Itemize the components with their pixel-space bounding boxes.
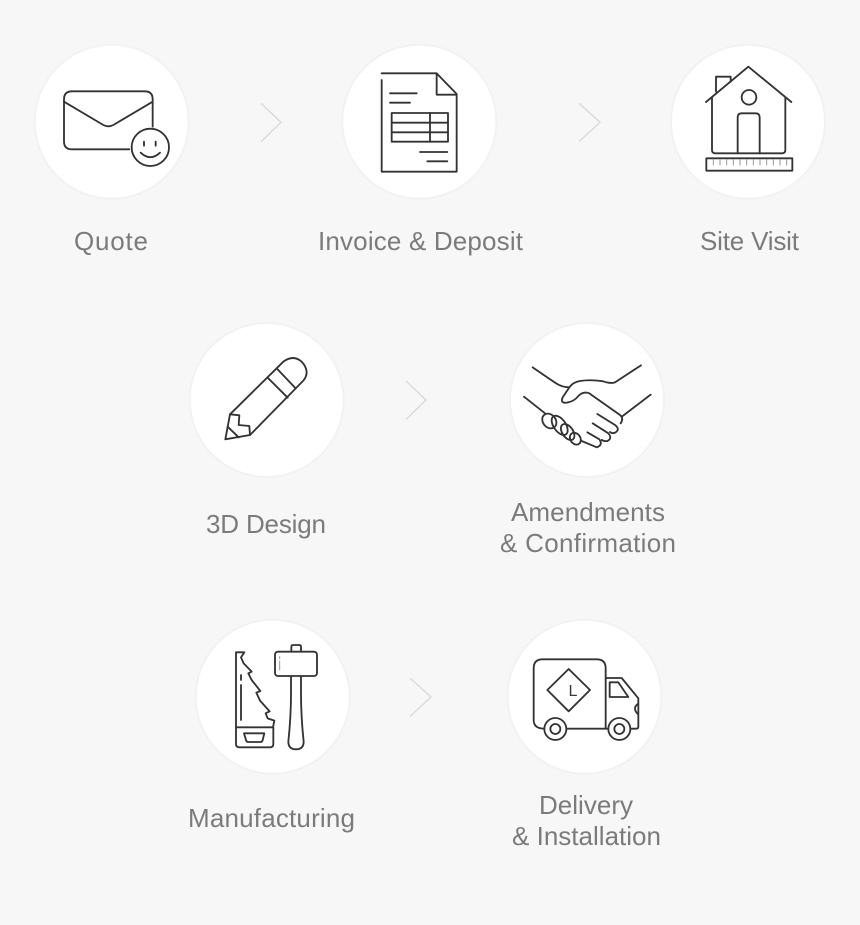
icon: envelope with smiley — [64, 91, 169, 166]
label: Site Visit: Site Visit — [700, 226, 800, 256]
label: Delivery & Installation: & Installation — [512, 821, 661, 851]
icon: invoice document — [382, 73, 457, 172]
step: 3D Design — [190, 323, 344, 539]
step: Amendments & Confirmation — [500, 323, 676, 558]
circle: Manufacturing — [196, 620, 350, 774]
step: Manufacturing — [188, 620, 355, 833]
arrow: 3D Design to Amendments — [406, 381, 426, 420]
circle: Invoice — [342, 45, 496, 199]
arrow: Quote to Invoice — [261, 103, 281, 142]
icon: delivery truck — [534, 659, 638, 740]
step: Delivery & Installation — [508, 620, 662, 851]
label: Amendments & Confirmation: Amendments — [511, 497, 665, 527]
label: Invoice & Deposit: Invoice & Deposit — [318, 226, 524, 256]
circle: Quote — [35, 45, 189, 199]
step: Site Visit — [671, 45, 825, 256]
circle: Site Visit — [671, 45, 825, 199]
label: 3D Design: 3D Design — [206, 509, 326, 539]
circle: 3D Design — [190, 323, 344, 477]
circle: Amendments — [510, 323, 664, 477]
icon: house with ruler — [706, 67, 792, 171]
step: Quote — [35, 45, 189, 256]
icon: pencil — [225, 358, 307, 439]
label: Delivery & Installation: Delivery — [539, 790, 633, 820]
label: Amendments & Confirmation: & Confirmation — [500, 528, 676, 558]
icon letter: L: L — [568, 683, 578, 700]
label: Manufacturing: Manufacturing — [188, 803, 355, 833]
arrow: Invoice to Site Visit — [579, 103, 600, 142]
step: Invoice & Deposit — [318, 45, 524, 256]
icon: saw and hammer — [236, 645, 317, 749]
icon: handshake — [524, 365, 651, 447]
arrow: Manufacturing to Delivery — [410, 678, 431, 716]
circle: Delivery — [508, 620, 662, 774]
label: Quote: Quote — [74, 226, 148, 256]
